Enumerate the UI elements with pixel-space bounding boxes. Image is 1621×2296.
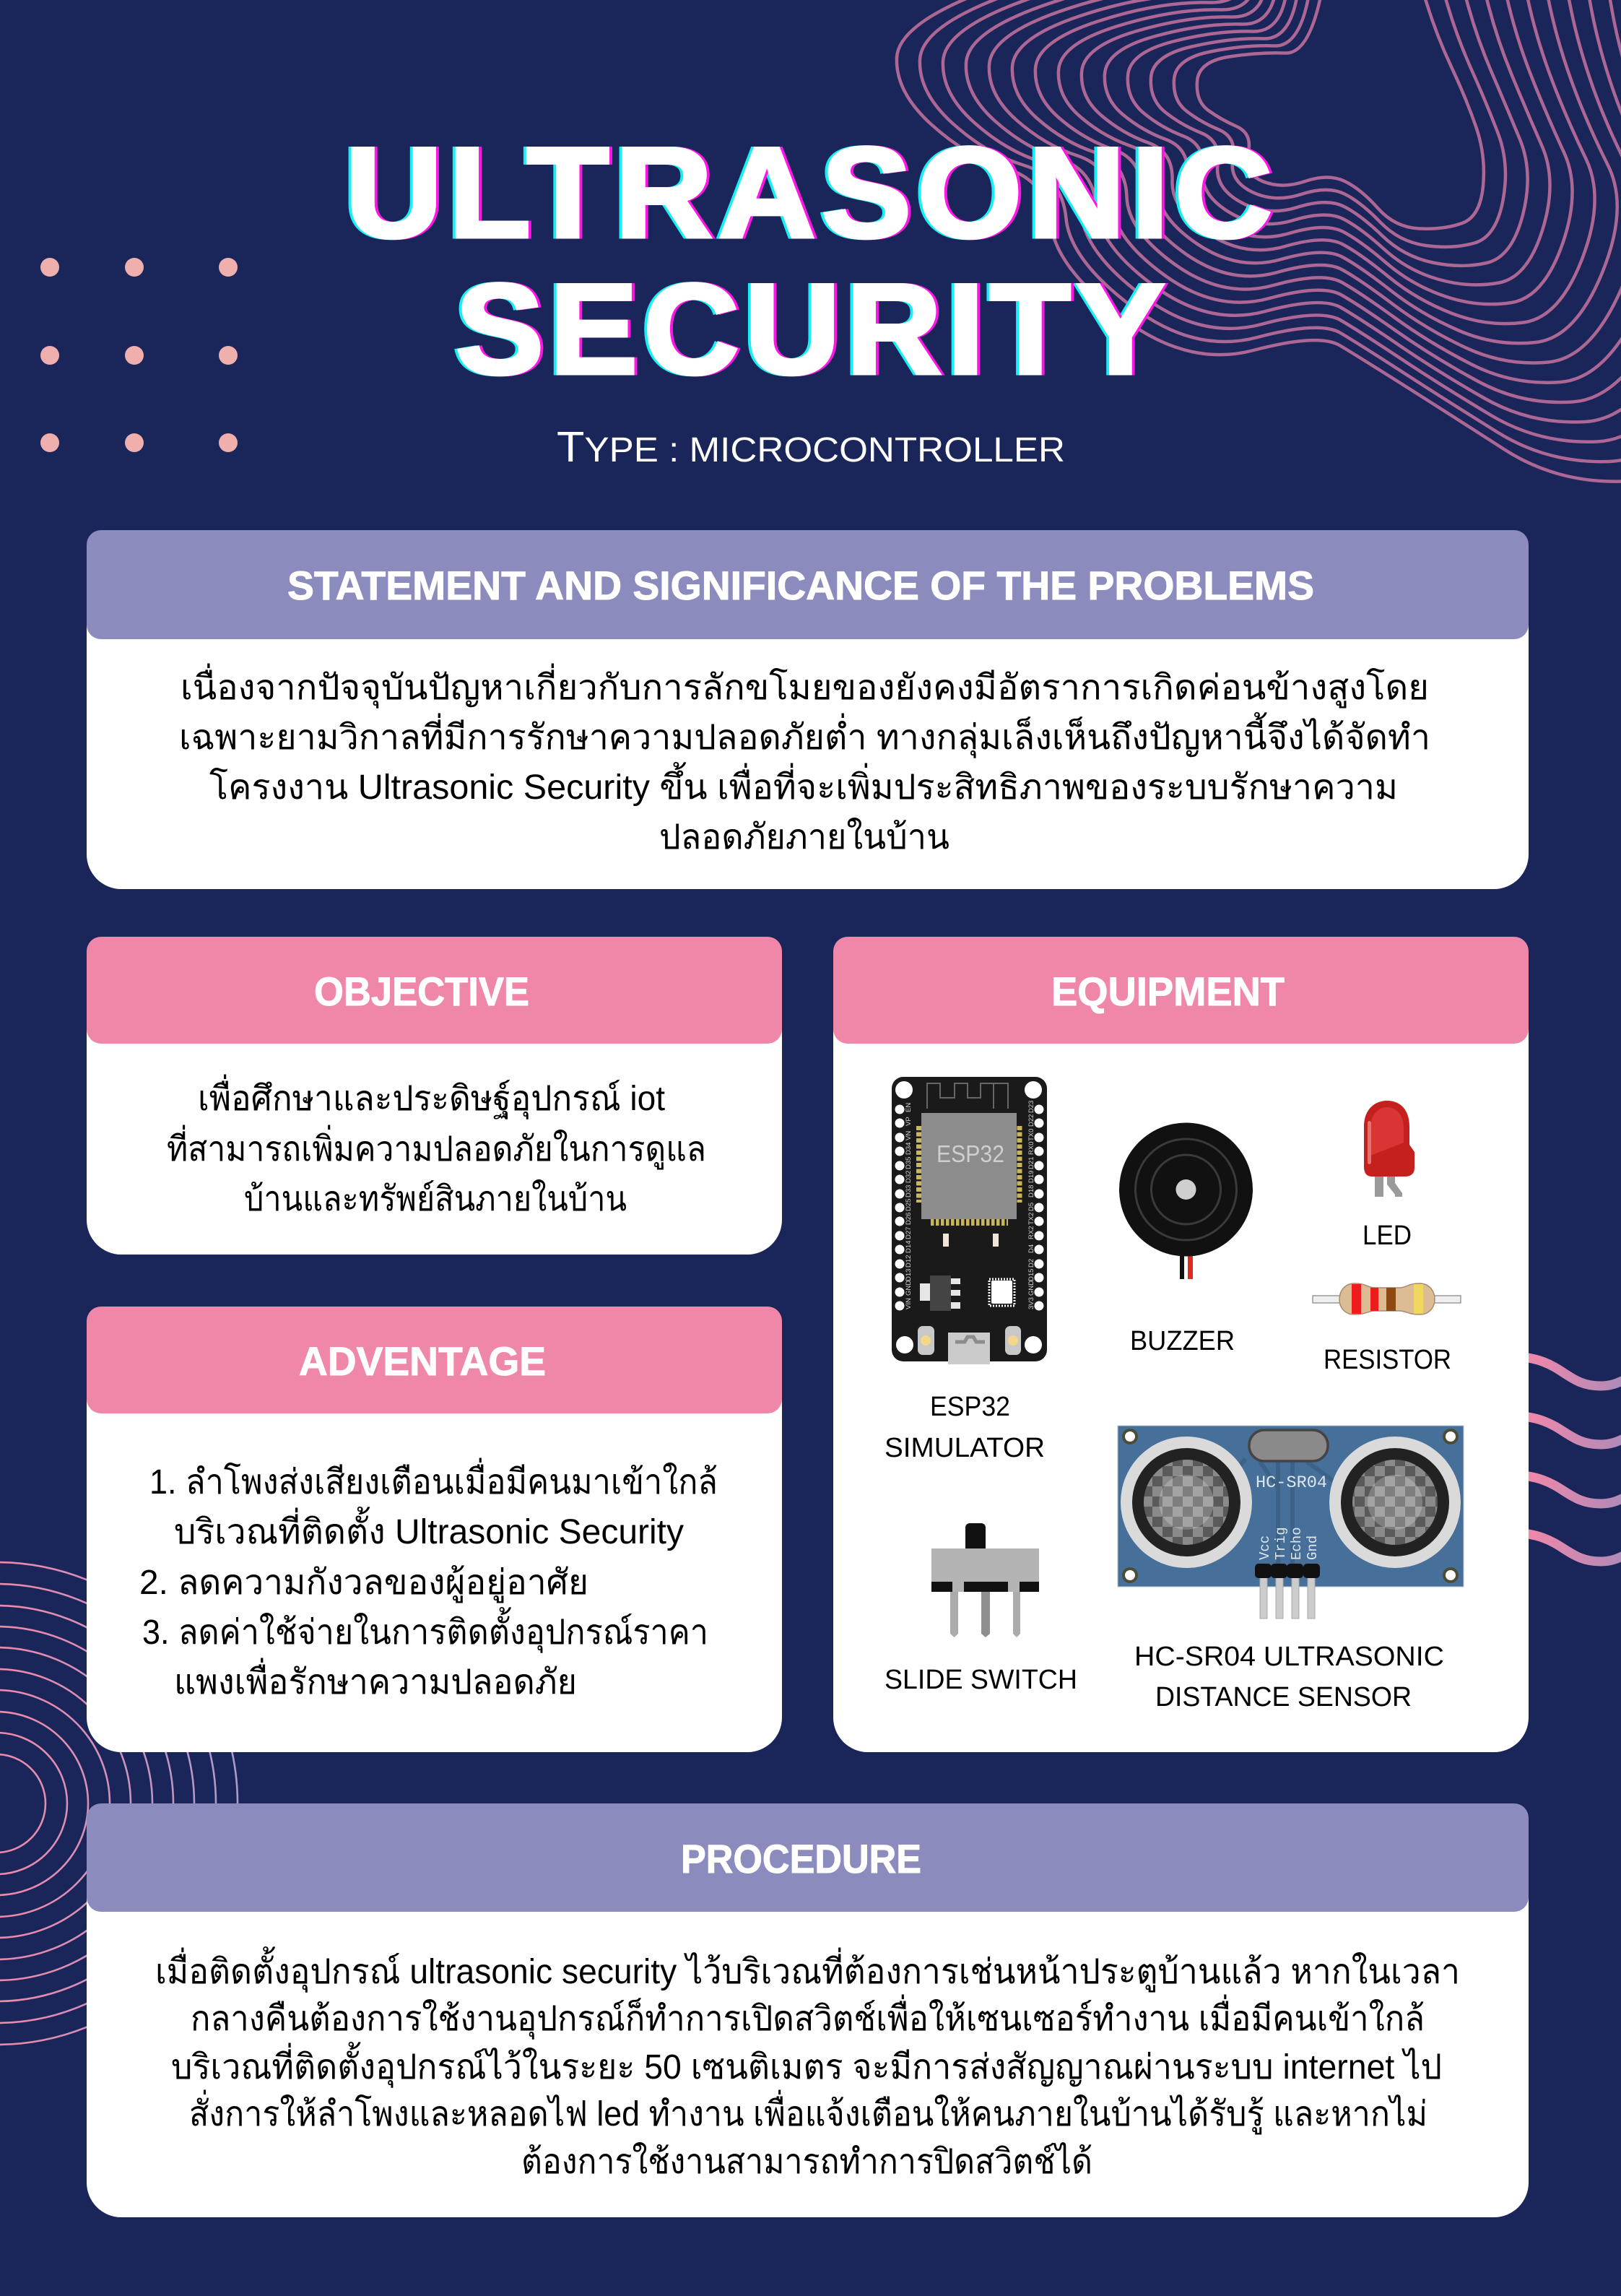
text block: objective body <box>167 1074 706 1218</box>
panel: procedure <box>87 1803 1529 2217</box>
icon: HC-SR04 ultrasonic sensor: Trig <box>1273 1527 1289 1560</box>
icon: ESP32 board <box>892 1077 1047 1364</box>
icon: ESP32 board: D34 <box>905 1143 913 1155</box>
icon: HC-SR04 ultrasonic sensor: Echo <box>1289 1527 1305 1560</box>
icon: buzzer <box>1119 1122 1253 1279</box>
heading: objective: OBJECTIVE <box>314 969 529 1014</box>
icon: ESP32 board: TX0 <box>1027 1129 1035 1141</box>
icon: ESP32 board: D18 <box>1027 1185 1035 1197</box>
decorative concentric circles left <box>0 1562 238 2045</box>
icon: ESP32 board: RX0 <box>1027 1142 1035 1155</box>
decorative dot grid <box>40 258 238 452</box>
title: ULTRASONIC <box>345 121 1278 264</box>
icon: ESP32 board: EN <box>905 1103 913 1112</box>
text block: procedure body: สั่งการให้ลำโพงและหลอดไฟ led ทำงาน เพื่อแจ้งเตือนให้คนภายในบ้านได้รับรู้ และหากไม่ <box>189 2089 1427 2135</box>
icon: ESP32 board: D33 <box>905 1185 913 1197</box>
icon: slide switch <box>931 1523 1039 1637</box>
icon: HC-SR04 ultrasonic sensor: Gnd <box>1305 1535 1321 1560</box>
label: ESP32 simulator: SIMULATOR <box>885 1433 1045 1463</box>
decorative contour waves top right <box>897 0 1621 482</box>
icon: ESP32 board: D35 <box>905 1157 913 1169</box>
text block: advantage list <box>139 1457 718 1702</box>
heading: statement: STATEMENT AND SIGNIFICANCE OF THE PROBLEMS <box>287 563 1314 608</box>
text block: procedure body: ต้องการใช้งานสามารถทำการปิดสวิตช์ได้ <box>521 2141 1092 2181</box>
icon: ESP32 board: ESP32 <box>936 1140 1004 1167</box>
text block: statement body: เนื่องจากปัจจุบันปัญหาเกี่ยวกับการลักขโมยของยังคงมีอัตราการเกิดค่อนข้างสูงโดย <box>181 663 1429 709</box>
text block: procedure body <box>155 1946 1460 2181</box>
icon: ESP32 board: VP <box>905 1117 913 1126</box>
label: ESP32 simulator <box>885 1392 1045 1463</box>
label: LED: LED <box>1363 1221 1412 1251</box>
icon: ESP32 board: D15 <box>1027 1269 1035 1281</box>
text block: statement body: เฉพาะยามวิกาลที่มีการรักษาความปลอดภัยต่ำ ทางกลุ่มเล็งเห็นถึงปัญหานี้จึงได้จัดทำ <box>179 712 1430 758</box>
text block: statement body <box>179 663 1430 857</box>
icon: LED <box>1364 1101 1414 1197</box>
panel: equipment <box>833 937 1529 1752</box>
text block: objective body: ที่สามารถเพิ่มความปลอดภัยในการดูแล <box>167 1125 706 1170</box>
icon: HC-SR04 ultrasonic sensor: Vcc <box>1257 1535 1273 1560</box>
icon: ESP32 board: D25 <box>905 1199 913 1211</box>
icon: HC-SR04 ultrasonic sensor: HC-SR04 <box>1256 1473 1327 1492</box>
text block: statement body: โครงงาน Ultrasonic Security ขึ้น เพื่อที่จะเพิ่มประสิทธิภาพของระบบรักษาความ <box>209 762 1398 807</box>
title <box>345 121 1278 401</box>
icon: ESP32 board: D14 <box>905 1241 913 1253</box>
text block: objective body: เพื่อศึกษาและประดิษฐ์อุปกรณ์ iot <box>198 1074 665 1119</box>
text block: advantage list: แพงเพื่อรักษาความปลอดภัย <box>174 1658 577 1702</box>
panel: objective <box>87 937 782 1255</box>
text block: advantage list: 3. ลดค่าใช้จ่ายในการติดตั้งอุปกรณ์ราคา <box>142 1607 708 1653</box>
icon: ESP32 board: VIN <box>905 1298 913 1309</box>
icon: ESP32 board: D19 <box>1027 1171 1035 1183</box>
text block: statement body: ปลอดภัยภายในบ้าน <box>659 817 949 857</box>
icon: ESP32 board: D22 <box>1027 1114 1035 1127</box>
panel: statement and significance <box>87 530 1529 889</box>
label: HC-SR04 sensor: HC-SR04 ULTRASONIC <box>1134 1642 1444 1672</box>
icon: ESP32 board: D21 <box>1027 1157 1035 1169</box>
label: slide switch: SLIDE SWITCH <box>885 1665 1077 1695</box>
title: SECURITY <box>456 257 1170 401</box>
label: HC-SR04 sensor <box>1134 1642 1444 1712</box>
text block: procedure body: เมื่อติดตั้งอุปกรณ์ ultrasonic security ไว้บริเวณที่ต้องการเช่นหน้าประตูบ้านแล้ว หากในเวลา <box>155 1946 1460 1993</box>
text block: objective body: บ้านและทรัพย์สินภายในบ้าน <box>244 1179 627 1218</box>
icon: ESP32 board: VN <box>905 1131 913 1140</box>
icon: ESP32 board: GND <box>1027 1281 1035 1296</box>
icon: ESP32 board: 3V3 <box>1027 1297 1035 1309</box>
heading: adventage: ADVENTAGE <box>299 1338 546 1384</box>
icon: ESP32 board: D4 <box>1027 1244 1035 1253</box>
icon: HC-SR04 ultrasonic sensor <box>1118 1426 1464 1619</box>
icon: ESP32 board: D2 <box>1027 1259 1035 1268</box>
subtitle: TYPE : MICROCONTROLLER <box>557 423 1065 471</box>
icon: ESP32 board: TX2 <box>1027 1213 1035 1225</box>
text block: advantage list: 1. ลำโพงส่งเสียงเตือนเมื่อมีคนมาเข้าใกล้ <box>149 1457 718 1502</box>
label: buzzer: BUZZER <box>1130 1326 1235 1356</box>
panel: advantage <box>87 1307 782 1752</box>
text block: advantage list: 2. ลดความกังวลของผู้อยู่อาศัย <box>139 1564 588 1603</box>
icon: ESP32 board: RX2 <box>1027 1226 1035 1239</box>
icon: ESP32 board: GND <box>905 1281 913 1296</box>
icon: ESP32 board: D26 <box>905 1213 913 1225</box>
text block: advantage list: บริเวณที่ติดตั้ง Ultrasonic Security <box>174 1507 684 1551</box>
text block: procedure body: บริเวณที่ติดตั้งอุปกรณ์ไว้ในระยะ 50 เซนติเมตร จะมีการส่งสัญญาณผ่านระบบ internet ไป <box>171 2042 1442 2088</box>
icon: ESP32 board: D32 <box>905 1171 913 1183</box>
icon: ESP32 board: D27 <box>905 1227 913 1239</box>
label: resistor: RESISTOR <box>1324 1345 1451 1375</box>
icon: ESP32 board: D5 <box>1027 1203 1035 1211</box>
icon: ESP32 board: D13 <box>905 1269 913 1281</box>
text block: procedure body: กลางคืนต้องการใช้งานอุปกรณ์ก็ทำการเปิดสวิตช์เพื่อให้เซนเซอร์ทำงาน เมื่อมีคนเข้าใกล้ <box>191 1994 1425 2040</box>
decorative wavy lines right <box>1509 1356 1621 1561</box>
icon: ESP32 board: D12 <box>905 1255 913 1268</box>
label: HC-SR04 sensor: DISTANCE SENSOR <box>1155 1682 1412 1712</box>
icon: resistor <box>1313 1283 1461 1314</box>
icon: ESP32 board: D23 <box>1027 1101 1035 1113</box>
heading: procedure: PROCEDURE <box>681 1836 921 1881</box>
label: ESP32 simulator: ESP32 <box>930 1392 1010 1422</box>
heading: equipment: EQUIPMENT <box>1051 969 1285 1014</box>
